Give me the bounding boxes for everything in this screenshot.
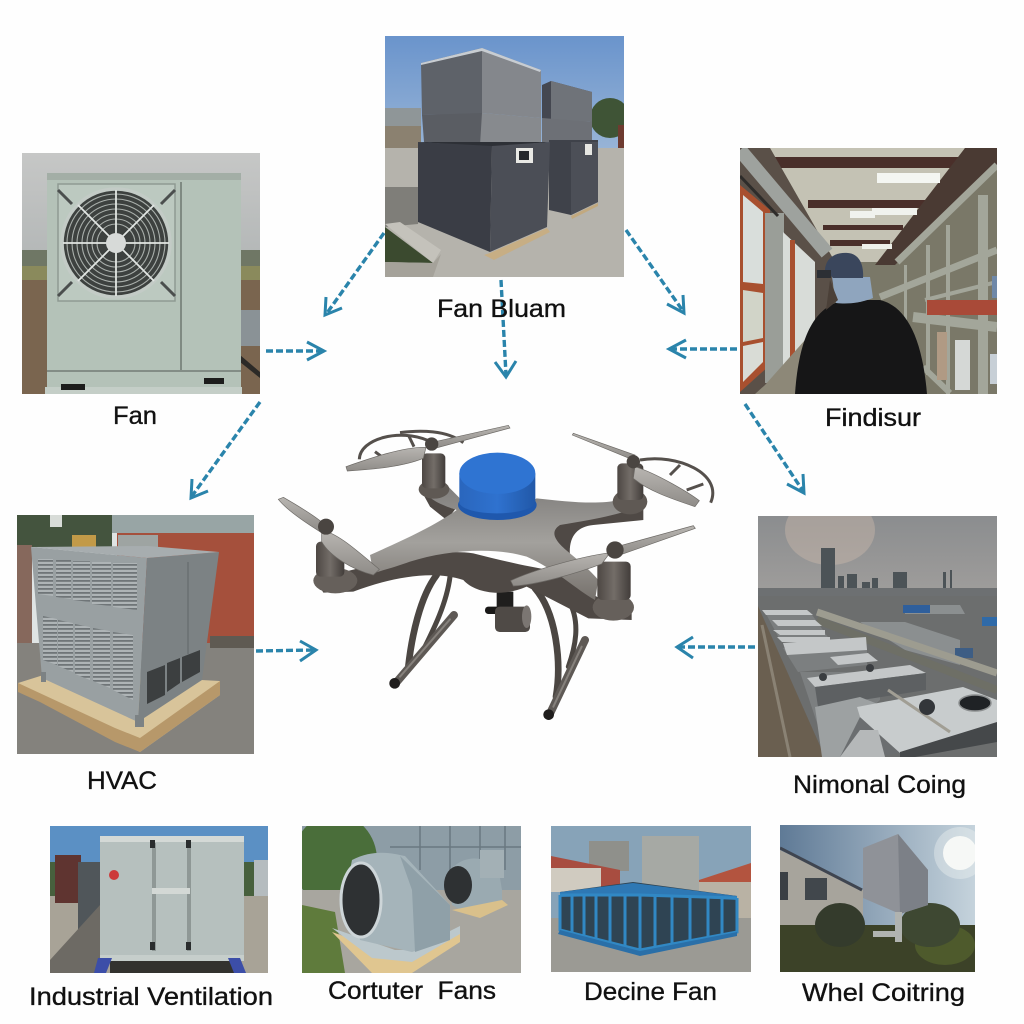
arrow: HVAC to drone (256, 641, 316, 661)
label: Industrial Ventilation: Industrial Ventilation (29, 983, 273, 1011)
body top shell (370, 485, 640, 600)
label: Whel Coitring: Whel Coitring (802, 979, 965, 1007)
central drone illustration (278, 425, 713, 720)
photo: cooling tower on stand (780, 825, 975, 972)
label: Decine Fan: Decine Fan (584, 978, 717, 1006)
label: Findisur: Findisur (825, 404, 921, 432)
photo: dark enclosures (385, 36, 624, 277)
photo: fan unit (22, 153, 260, 394)
arrow: city to drone (677, 637, 755, 658)
photo: city rooftops (758, 516, 997, 757)
label: Nimonal Coing: Nimonal Coing (793, 771, 966, 799)
photo: centrifugal fans on pallets (302, 826, 521, 973)
arrow: factory to city (745, 404, 804, 493)
motors (313, 453, 647, 621)
arrow: fan to HVAC (191, 402, 260, 498)
propeller hubs (318, 437, 640, 559)
gimbal camera (485, 592, 531, 632)
body underside (315, 488, 643, 620)
arrow: factory to centre (669, 340, 737, 358)
photo: HVAC unit on pallet (17, 515, 254, 754)
propellers (278, 425, 699, 586)
back propeller guards (359, 431, 713, 503)
arrow: top photo to drone (495, 280, 516, 377)
photo: industrial ventilation cabinet (50, 826, 268, 973)
landing legs (408, 575, 576, 697)
arrow: top photo to right (626, 230, 684, 313)
photo: factory aisle with worker (740, 148, 997, 394)
label: Cortuter Fans: Cortuter Fans (328, 977, 496, 1005)
blue payload cylinder (458, 453, 537, 520)
label: Fan Bluam: Fan Bluam (437, 295, 566, 323)
arrow: fan to centre (266, 342, 324, 360)
photo: blue glass enclosure (551, 826, 751, 972)
arrow: top photo to left (325, 233, 384, 315)
label: Fan: Fan (113, 402, 157, 430)
label: HVAC: HVAC (87, 767, 157, 795)
